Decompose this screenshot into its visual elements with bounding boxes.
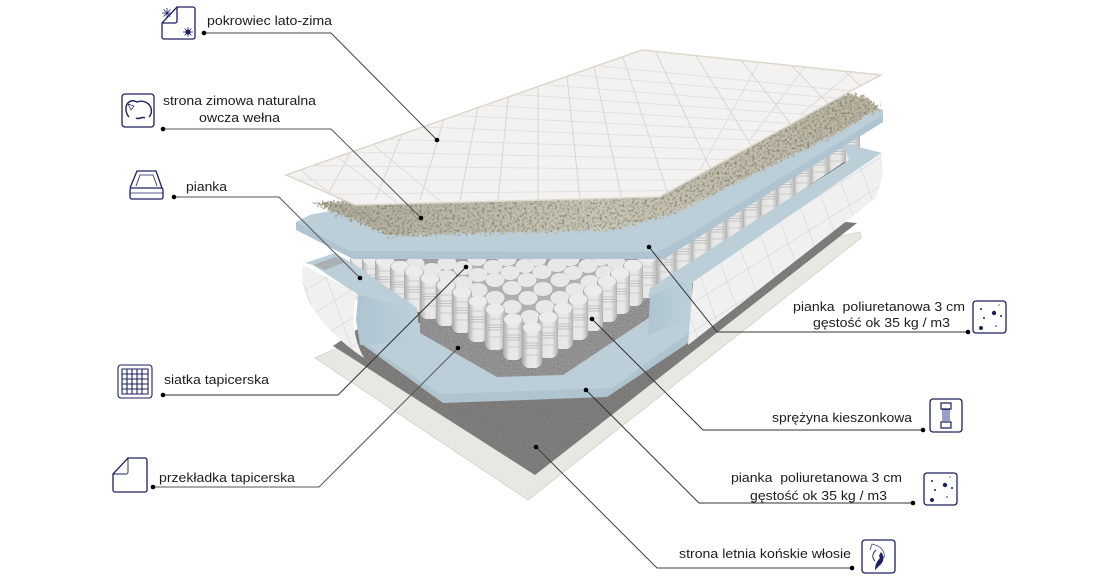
right quilted side panel <box>688 153 883 345</box>
label: pianka poliuretanowa upper: gęstość ok 35 kg / m3 <box>813 315 950 330</box>
label: pianka poliuretanowa lower: gęstość ok 35 kg / m3 <box>750 488 887 503</box>
label: strona zimowa naturalna owcza wełna: strona zimowa naturalna <box>163 93 317 108</box>
top polyurethane foam <box>296 105 883 259</box>
label: pianka poliuretanowa upper: pianka poliuretanowa 3 cm <box>793 299 965 314</box>
icon: foam tray <box>130 171 163 199</box>
label: pianka: pianka <box>186 179 228 194</box>
cream bottom sheet <box>315 232 861 500</box>
label: pianka poliuretanowa lower: pianka poliuretanowa 3 cm <box>731 470 902 485</box>
label: strona zimowa naturalna owcza wełna <box>163 93 317 125</box>
icon: horse <box>862 540 895 573</box>
summer-winter cover <box>284 49 884 206</box>
bottom polyurethane foam <box>360 295 700 403</box>
upholstery spacer <box>420 270 650 377</box>
leader: strona zimowa <box>161 127 423 220</box>
label: przekładka tapicerska: przekładka tapicerska <box>159 470 296 485</box>
icon: foam density upper <box>973 301 1006 333</box>
label: strona zimowa naturalna owcza wełna: owcza wełna <box>199 110 281 125</box>
pocket spring block <box>350 119 860 368</box>
icon: spacer sheet <box>113 458 147 492</box>
leader: pianka poliuretanowa upper <box>647 245 970 334</box>
left quilted side panel <box>302 265 364 358</box>
label: pianka poliuretanowa lower <box>731 470 902 503</box>
leader: strona letnia <box>534 445 854 570</box>
icon: sheep <box>122 94 154 127</box>
leader: pokrowiec lato-zima <box>202 31 439 142</box>
left foam border <box>305 253 420 345</box>
leader: sprężyna kieszonkowa <box>590 317 925 432</box>
leader: siatka tapicerska <box>161 265 468 397</box>
infographic: mattress cross-section <box>112 6 1007 574</box>
label: pokrowiec lato-zima: pokrowiec lato-zima <box>207 13 333 28</box>
icon: cover with snowflake and sun <box>162 7 195 39</box>
leader: przekładka tapicerska <box>151 346 460 489</box>
icon: pocket spring <box>930 399 962 432</box>
icon: upholstery mesh <box>118 365 152 398</box>
leader: pianka poliuretanowa lower <box>584 388 915 505</box>
leader: pianka <box>172 195 362 280</box>
front right spring row <box>522 252 657 368</box>
interior springs <box>406 252 626 356</box>
label: siatka tapicerska: siatka tapicerska <box>164 372 270 387</box>
winter side natural sheep wool <box>312 92 880 236</box>
front left spring row <box>350 254 523 360</box>
rear right spring row <box>656 119 860 285</box>
label: pianka poliuretanowa upper <box>793 299 965 330</box>
right foam border <box>648 143 882 335</box>
label: sprężyna kieszonkowa: sprężyna kieszonkowa <box>772 410 913 425</box>
horsehair summer layer <box>333 222 857 475</box>
label: strona letnia końskie włosie: strona letnia końskie włosie <box>679 546 851 561</box>
icon: foam density lower <box>924 473 957 505</box>
